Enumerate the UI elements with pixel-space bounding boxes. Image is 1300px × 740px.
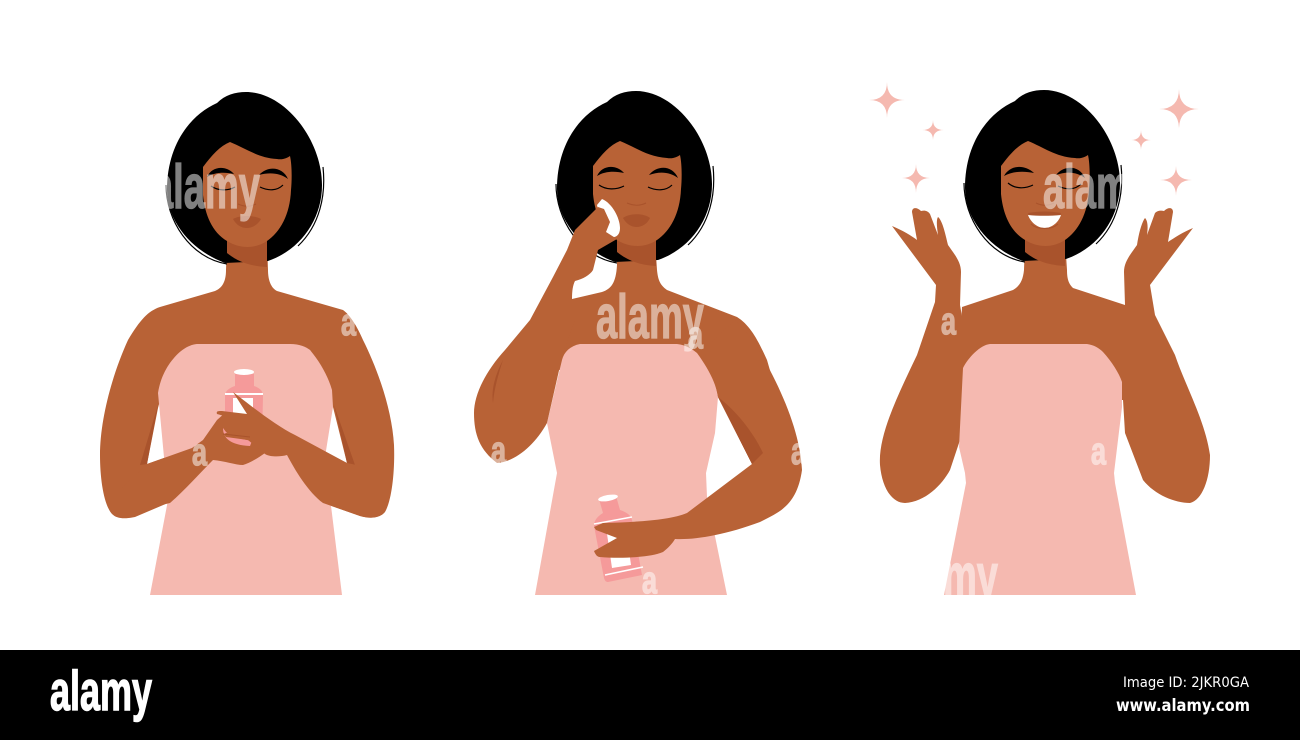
nose bbox=[1036, 203, 1054, 205]
arm shadows bbox=[140, 405, 355, 465]
watermark: a bbox=[192, 432, 208, 474]
face bbox=[1001, 141, 1090, 246]
hair outline bbox=[964, 165, 1122, 262]
figure 2: woman wiping face with cotton pad bbox=[474, 91, 802, 595]
watermark: alamy bbox=[890, 542, 998, 611]
sparkles bbox=[869, 82, 1199, 196]
figure 1: woman holding toner bottle bbox=[100, 92, 394, 595]
bottle label bbox=[606, 523, 631, 568]
watermark: alamy bbox=[1043, 153, 1151, 222]
face bbox=[593, 141, 682, 246]
bottle cap bbox=[598, 493, 618, 503]
towel dress bbox=[535, 344, 727, 595]
watermark: alamy bbox=[596, 283, 704, 352]
left forearm and hand bbox=[120, 412, 265, 510]
towel dress bbox=[150, 344, 342, 595]
watermark: a bbox=[491, 430, 507, 472]
stock watermarks bbox=[152, 153, 1151, 611]
sparkle bbox=[1131, 130, 1151, 150]
watermark: a bbox=[688, 315, 704, 357]
figure 3: smiling woman with raised hands bbox=[869, 82, 1210, 595]
lower lip bbox=[1031, 224, 1058, 228]
finger gap detail bbox=[223, 434, 250, 437]
hair outline bbox=[166, 167, 324, 264]
neck shadow bbox=[617, 239, 656, 266]
bottle label bbox=[233, 398, 253, 434]
closed eyes bbox=[599, 185, 672, 190]
sparkle bbox=[1159, 89, 1199, 129]
sparkle bbox=[869, 82, 905, 118]
left raised arm and hand bbox=[880, 208, 967, 503]
footer bar bbox=[0, 650, 1300, 740]
right forearm and hand bbox=[217, 392, 383, 518]
bottle cap bbox=[234, 369, 254, 375]
body and upper arms bbox=[100, 240, 394, 518]
eyebrows bbox=[207, 168, 288, 179]
lips bbox=[233, 216, 261, 228]
toner bottle bbox=[594, 493, 643, 582]
bottle stripes bbox=[594, 517, 643, 575]
bottle base between fingers bbox=[223, 428, 252, 446]
eyebrows bbox=[1004, 167, 1085, 178]
sparkle bbox=[922, 120, 944, 140]
head bbox=[556, 91, 714, 266]
watermark: a bbox=[791, 431, 807, 473]
lips bbox=[623, 214, 650, 227]
head bbox=[964, 90, 1122, 266]
hair bbox=[557, 91, 712, 262]
watermark: a bbox=[1091, 431, 1107, 473]
inner arm shadow bbox=[718, 397, 763, 464]
hair outline bbox=[556, 166, 714, 263]
smile bbox=[1028, 215, 1061, 228]
head bbox=[166, 92, 324, 267]
hair bbox=[167, 92, 322, 263]
raised arm and hand bbox=[474, 207, 617, 463]
bottle stripe bbox=[225, 393, 263, 395]
nose bbox=[627, 203, 646, 205]
body and shoulders bbox=[540, 240, 790, 464]
watermark: alamy bbox=[152, 153, 260, 222]
hair bbox=[965, 90, 1120, 261]
sparkle bbox=[1160, 166, 1192, 196]
website: www.alamy.com bbox=[1116, 696, 1250, 715]
watermark: a bbox=[341, 302, 357, 344]
bottle body bbox=[225, 374, 263, 445]
upper lip bbox=[1028, 212, 1061, 216]
elbow crease bbox=[492, 360, 503, 403]
right raised arm and hand bbox=[1120, 208, 1210, 503]
closed eyes bbox=[1008, 183, 1081, 189]
closed eyes bbox=[211, 185, 283, 190]
nose bbox=[238, 204, 256, 206]
toner bottle bbox=[225, 369, 263, 445]
neck shadow bbox=[227, 240, 267, 267]
face bbox=[203, 142, 292, 247]
towel dress bbox=[944, 344, 1136, 595]
footer logo: alamy bbox=[50, 659, 152, 722]
eyebrows bbox=[597, 167, 678, 178]
image id: Image ID: 2JKR0GA bbox=[1123, 675, 1249, 691]
arm holding bottle bbox=[594, 320, 802, 558]
shoulders bbox=[958, 240, 1125, 400]
watermark: a bbox=[941, 301, 957, 343]
watermark: a bbox=[642, 560, 658, 602]
bottle body bbox=[594, 496, 642, 582]
sparkle bbox=[902, 164, 930, 193]
cotton pad bbox=[597, 199, 620, 237]
neck shadow bbox=[1025, 238, 1065, 266]
